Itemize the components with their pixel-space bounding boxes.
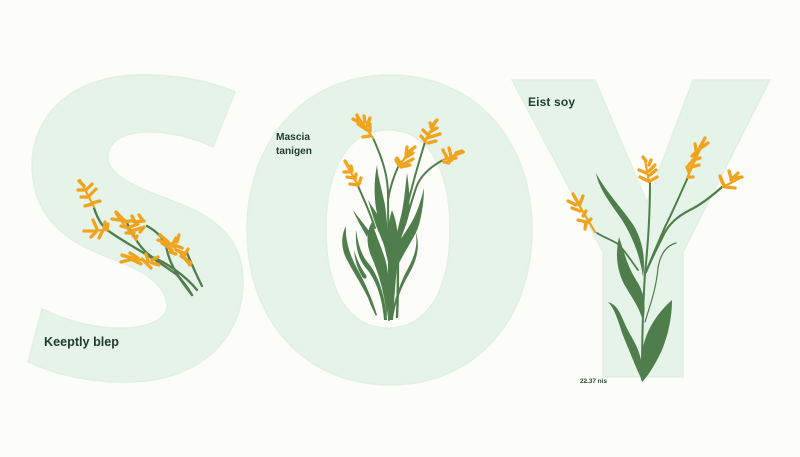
sprig: left (344, 161, 361, 185)
plant: O grass (342, 115, 464, 320)
sprig: bottom (121, 253, 159, 268)
sprig: top left (353, 115, 373, 138)
leaf: lower left (608, 302, 642, 378)
sprig: right (443, 148, 464, 163)
leaf: lower right (640, 300, 672, 382)
sprig: right (158, 234, 191, 265)
letter O (247, 75, 532, 385)
sprig: top right (421, 120, 440, 143)
heading label: Keeptly blep: Keeptly blep (44, 334, 119, 349)
leaf: upper left (596, 173, 644, 277)
letter Y (512, 80, 770, 377)
leaves: O grass (342, 165, 424, 320)
sprig: middle (396, 147, 415, 167)
sprig: top (78, 180, 100, 207)
sprig: upper right (687, 138, 708, 177)
plant: S sprigs (78, 180, 202, 295)
letter S (28, 75, 243, 382)
sprig: left (84, 220, 108, 238)
sprig: far right (720, 171, 742, 188)
sprig: top (639, 157, 657, 182)
text label: price note: 22.37 nis (580, 378, 607, 385)
text label: Eist soy: Eist soy (528, 95, 575, 109)
text label: Mascia tanigen: Mascia (276, 132, 310, 143)
leaf: middle left (617, 237, 645, 322)
sprig: centre (112, 212, 144, 240)
plant: Y stalk (568, 138, 742, 382)
text label: Mascia tanigen: tanigen (276, 146, 312, 157)
sprig: left (568, 194, 595, 232)
